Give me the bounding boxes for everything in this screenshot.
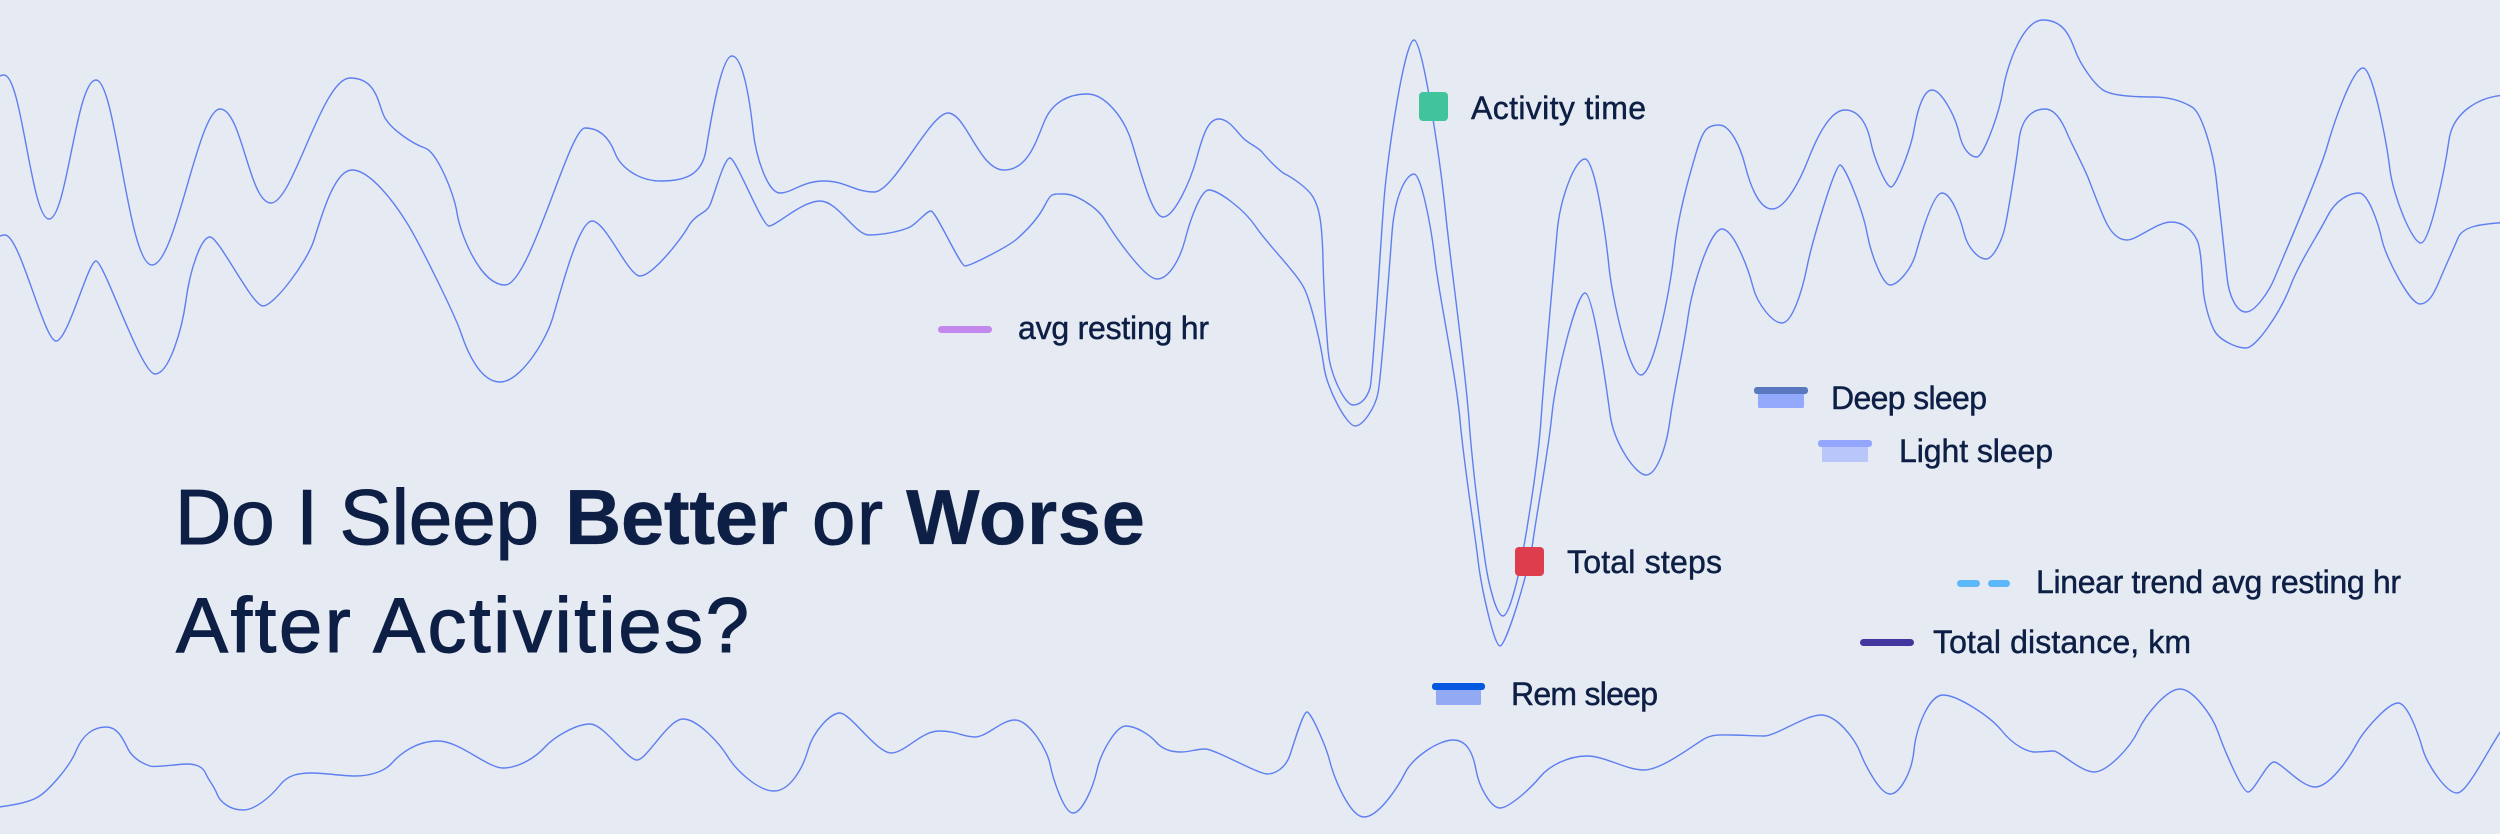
legend: avg resting hr: avg resting hr [1018,310,1209,346]
legend: total steps: Total steps [1567,544,1722,580]
line: bottom wave [0,689,2500,817]
legend: rem sleep: Rem sleep [1511,676,1658,712]
title: After Activities? [176,581,749,669]
title: Better [565,473,788,561]
title: or [812,473,883,561]
line: upper wave [0,20,2500,616]
legend: deep sleep: Deep sleep [1831,380,1987,416]
legend: light sleep: Light sleep [1899,433,2053,469]
title [175,473,1145,669]
legend: activity time: Activity time [1471,90,1646,126]
title: Do I Sleep [175,473,539,561]
title: Worse [906,473,1145,561]
legend: linear trend avg resting hr: Linear trend avg resting hr [2036,564,2401,600]
legend: deep sleep [1754,380,1987,416]
legend: light sleep [1818,433,2053,469]
legend: total distance: Total distance, km [1933,624,2191,660]
line: lower wave [0,109,2500,646]
legend: rem sleep [1432,676,1658,712]
